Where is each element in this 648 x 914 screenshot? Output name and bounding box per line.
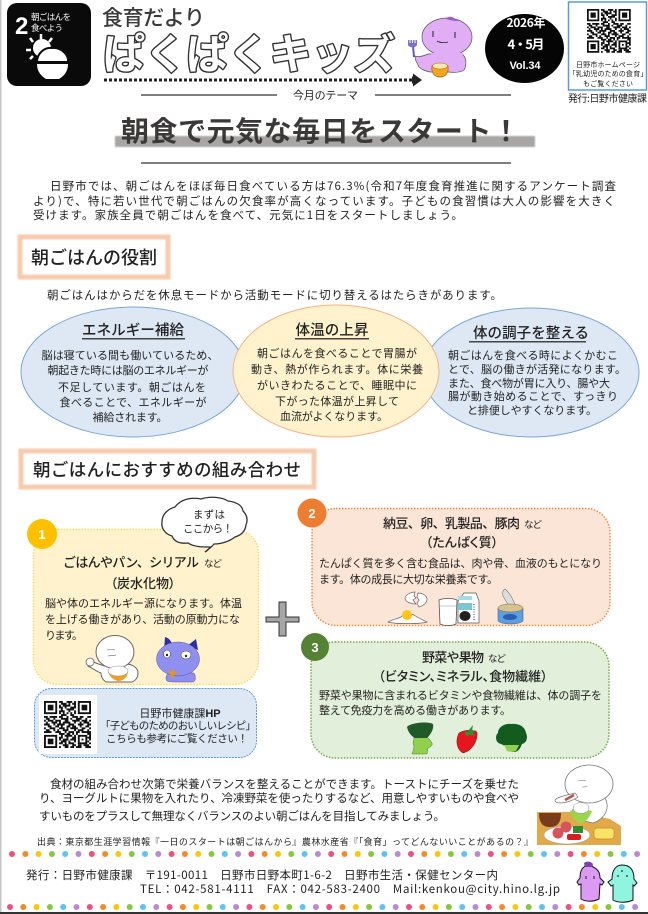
- speech bubble: まずは: [193, 507, 225, 522]
- badge 1: [27, 519, 57, 549]
- badge 1: 1: [38, 527, 46, 542]
- panel: protein: ます。体の成長に大切な栄養素です。: [319, 571, 498, 587]
- panel: carbohydrates: [27, 519, 258, 684]
- panel: energy supply: 脳は寝ている間も働いているため、: [42, 347, 218, 363]
- newsletter subtitle: 食育だより: [102, 2, 205, 32]
- panel: energy supply: [21, 307, 245, 437]
- panel: vegetables and fruit: 整えて免疫力を高める働きがあります。: [319, 702, 511, 718]
- panel: energy supply: 食べることで、エネルギーが: [60, 394, 206, 410]
- panel: body temperature: 下がった体温が上昇して: [275, 393, 399, 409]
- section heading: role of breakfast: [20, 237, 168, 277]
- role intro sentence: 朝ごはんはからだを休息モードから活動モードに切り替えるはたらきがあります。: [47, 287, 502, 303]
- dotted arrow: [104, 74, 422, 86]
- SDG goal 2 badge: [7, 3, 91, 86]
- footer contact details: 発行：日野市健康課 〒191-0011 日野市日野本町1-6-2 日野市生活・保健センター内: [26, 867, 498, 883]
- panel: recipes QR link: こちらも参考にご覧ください！: [106, 731, 248, 746]
- icon: sun and rice bowl: [26, 34, 68, 79]
- panel: recipes QR link: 日野市健康課HP: [139, 705, 221, 721]
- panel: energy supply: エネルギー補給: [82, 319, 184, 340]
- SDG goal 2 badge: 食べよう: [31, 22, 63, 34]
- icon: purple character with fork and bowl: [408, 17, 472, 77]
- section heading: recommended combination: 朝ごはんにおすすめの組み合わせ: [33, 457, 301, 482]
- panel: protein: （たんぱく質）: [426, 532, 498, 551]
- issue date oval: Vol.34: [510, 60, 541, 72]
- website QR box: [568, 2, 646, 90]
- panel: body regulation: また、食べ物が胃に入り、腸や大: [448, 375, 610, 391]
- panel: body temperature: 血流がよくなります。: [280, 408, 388, 424]
- icon: strawberry: [457, 725, 477, 753]
- panel: energy supply: 朝起きた時には脳のエネルギーが: [48, 362, 208, 378]
- issue date oval: [485, 14, 564, 83]
- source citation: 出典：東京都生涯学習情報『一日のスタートは朝ごはんから』農林水産省『「食育」ってどんないいことがあるの？』: [37, 835, 533, 848]
- panel: body temperature: がいきわたることで、睡眠中に: [257, 377, 417, 393]
- panel: body temperature: [233, 305, 439, 437]
- closing paragraph: [39, 776, 519, 824]
- footer contact details: [26, 867, 560, 897]
- website QR box: もご覧ください: [583, 79, 633, 89]
- closing paragraph: り、ヨーグルトに果物を入れたり、冷凍野菜を使ったりするなど、用意しやすいものや食べや: [39, 790, 519, 806]
- theme label: 今月のテーマ: [293, 87, 358, 103]
- panel: carbohydrates: ります。: [45, 627, 83, 643]
- issue date oval: 4・5月: [508, 34, 544, 53]
- badge 2: [298, 498, 326, 528]
- section heading: role of breakfast: 朝ごはんの役割: [31, 244, 157, 270]
- SDG goal 2 badge: 2: [15, 13, 28, 40]
- panel: vegetables and fruit: [301, 633, 609, 758]
- section heading: recommended combination: [21, 451, 314, 487]
- icon: blue cat character: [156, 637, 200, 682]
- panel: body temperature: 動き、熱が作られます。体に栄養: [251, 361, 423, 377]
- dotted divider: [9, 851, 640, 857]
- icon: white character with rice bowl: [86, 636, 138, 682]
- panel: carbohydrates: 脳や体のエネルギー源になります。体温: [45, 595, 242, 611]
- website QR box: 日野市ホームページ: [576, 60, 640, 70]
- speech bubble: ここから！: [183, 521, 233, 536]
- intro paragraph: より)で、特に若い世代で朝ごはんの欠食率が高くなっています。子どもの食習慣は大人の影響を大きく: [33, 193, 615, 209]
- dotted divider: [7, 904, 638, 910]
- panel: carbohydrates: （炭水化物）: [110, 573, 176, 592]
- intro paragraph: [33, 178, 616, 223]
- badge 2: 2: [308, 506, 316, 521]
- icon: purple and teal characters: [577, 862, 637, 902]
- icon: tuna can: [498, 589, 523, 624]
- panel: carbohydrates: など: [204, 556, 222, 570]
- panel: body temperature: 朝ごはんを食べることで胃腸が: [257, 345, 417, 361]
- newsletter title: ぱくぱくキッズ: [103, 21, 395, 82]
- panel: body regulation: [423, 308, 639, 437]
- closing paragraph: 食材の組み合わせ次第で栄養バランスを整えることができます。トーストにチーズを乗せた: [50, 776, 519, 792]
- publisher label: 発行:日野市健康課: [568, 90, 647, 105]
- panel: body regulation: 体の調子を整える: [473, 322, 589, 343]
- main headline: 朝食で元気な毎日をスタート！: [121, 110, 520, 150]
- plus sign: [266, 602, 299, 636]
- panel: carbohydrates: を上げる働きがあり、活動の原動力にな: [45, 611, 240, 627]
- panel: recipes QR link: [34, 688, 256, 758]
- badge 3: 3: [311, 640, 319, 655]
- panel: vegetables and fruit: 野菜や果物: [422, 647, 484, 666]
- icon: cracked egg: [388, 592, 427, 624]
- panel: vegetables and fruit: （ビタミン、ミネラル、食物繊維）: [378, 666, 548, 685]
- issue date oval: 2026年: [506, 14, 546, 31]
- panel: body regulation: とで、脳の働きが活発になります。: [448, 361, 626, 377]
- panel: body regulation: と排便しやすくなります。: [467, 402, 597, 418]
- icon: milk carton: [458, 593, 479, 623]
- panel: energy supply: 不足しています。朝ごはんを: [58, 379, 206, 395]
- intro paragraph: 受けます。家族全員で朝ごはんを食べて、元気に1日をスタートしましょう。: [33, 207, 463, 223]
- panel: body regulation: 朝ごはんを食べる時によくかむこ: [448, 347, 618, 363]
- panel: recipes QR link: 「子どものためのおいしいレシピ」: [100, 718, 256, 733]
- panel: body temperature: 体温の上昇: [296, 319, 368, 340]
- website QR box: 「乳幼児のための食育」: [572, 69, 644, 79]
- intro paragraph: 日野市では、朝ごはんをほぼ毎日食べている方は76.3%(令和7年度食育推進に関するアンケート調査: [50, 178, 616, 194]
- icon: leafy vegetable character: [407, 723, 433, 754]
- panel: vegetables and fruit: など: [488, 651, 506, 665]
- panel: protein: など: [524, 517, 542, 531]
- closing paragraph: すいものをプラスして無理なくバランスのよい朝ごはんを目指してみましょう。: [39, 808, 445, 824]
- icon: glass of milk: [439, 598, 457, 626]
- panel: protein: 納豆、卵、乳製品、豚肉: [383, 513, 520, 532]
- icon: character eating breakfast: [537, 765, 621, 845]
- footer contact details: TEL：042-581-4111 FAX：042-583-2400 Mail:kenkou@city.hino.lg.jp: [140, 881, 560, 897]
- panel: carbohydrates: ごはんやパン、シリアル: [63, 552, 199, 571]
- panel: energy supply: 補給されます。: [92, 409, 168, 425]
- badge 3: [301, 633, 329, 661]
- panel: protein: たんぱく質を多く含む食品は、肉や骨、血液のもとになり: [319, 555, 602, 571]
- SDG goal 2 badge: 朝ごはんを: [31, 11, 71, 23]
- panel: protein: [298, 498, 610, 626]
- icon: broccoli: [496, 724, 527, 752]
- panel: body regulation: 腸が動き始めることで、すっきり: [448, 388, 618, 404]
- panel: vegetables and fruit: 野菜や果物に含まれるビタミンや食物繊維は、体の調子を: [319, 687, 602, 703]
- speech bubble: [162, 497, 247, 552]
